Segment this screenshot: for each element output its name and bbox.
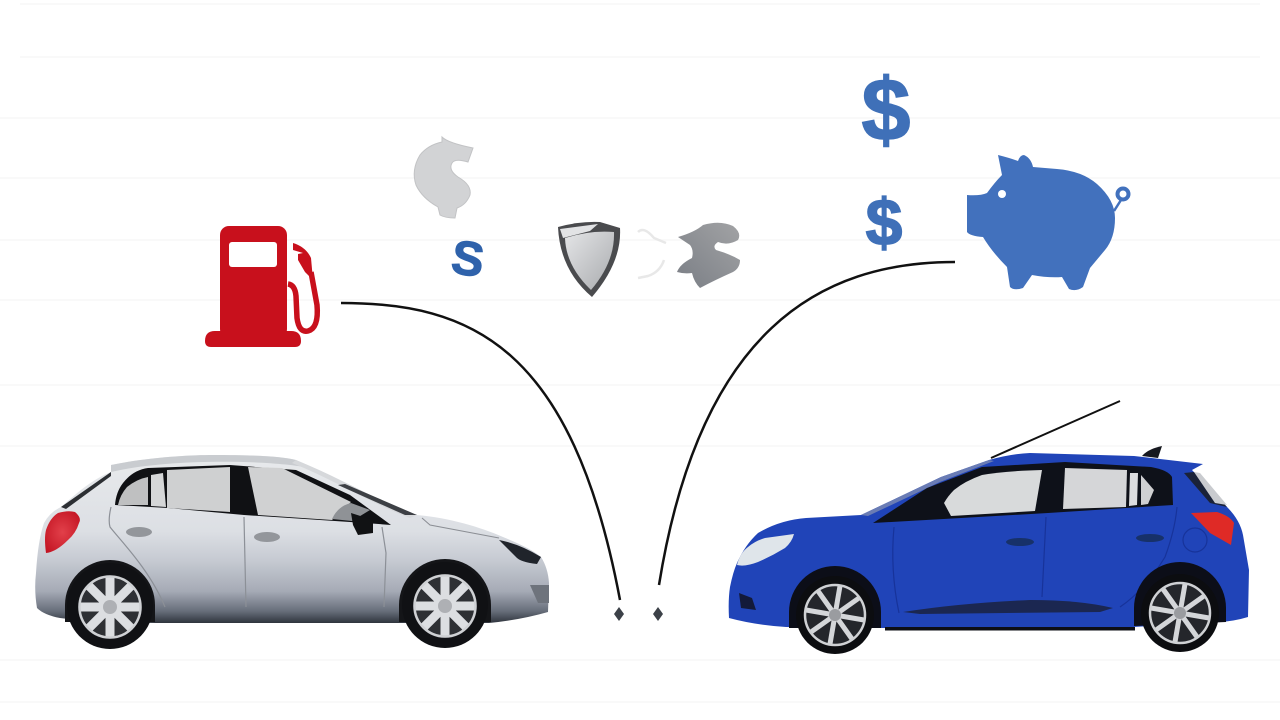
curve: right arrow path (659, 262, 955, 585)
icon: red fuel pump (205, 226, 317, 347)
blue car front wheel (789, 566, 881, 654)
antenna line on blue car (991, 401, 1120, 458)
blue hatchback car (729, 446, 1249, 654)
icon: grey metallic fragment (677, 223, 740, 288)
blue car rear wheel (1134, 562, 1226, 652)
marker: right curve end (653, 607, 663, 621)
curve: left arrow path (341, 303, 620, 600)
icon: blue piggy bank (967, 155, 1128, 290)
icon: small blue dollar sign: $ (866, 185, 902, 259)
icon: metallic shield (558, 222, 620, 297)
icon: faint dissolving fragment (638, 230, 666, 278)
silver car front wheel (399, 559, 491, 648)
icon: small blue S coin symbol: S (448, 231, 487, 288)
icon: silver dollar fragment (414, 137, 473, 218)
marker: left curve end (614, 607, 624, 621)
silver hatchback car (35, 455, 549, 649)
icon: large blue dollar sign: $ (862, 60, 910, 159)
silver car rear wheel (65, 560, 155, 649)
